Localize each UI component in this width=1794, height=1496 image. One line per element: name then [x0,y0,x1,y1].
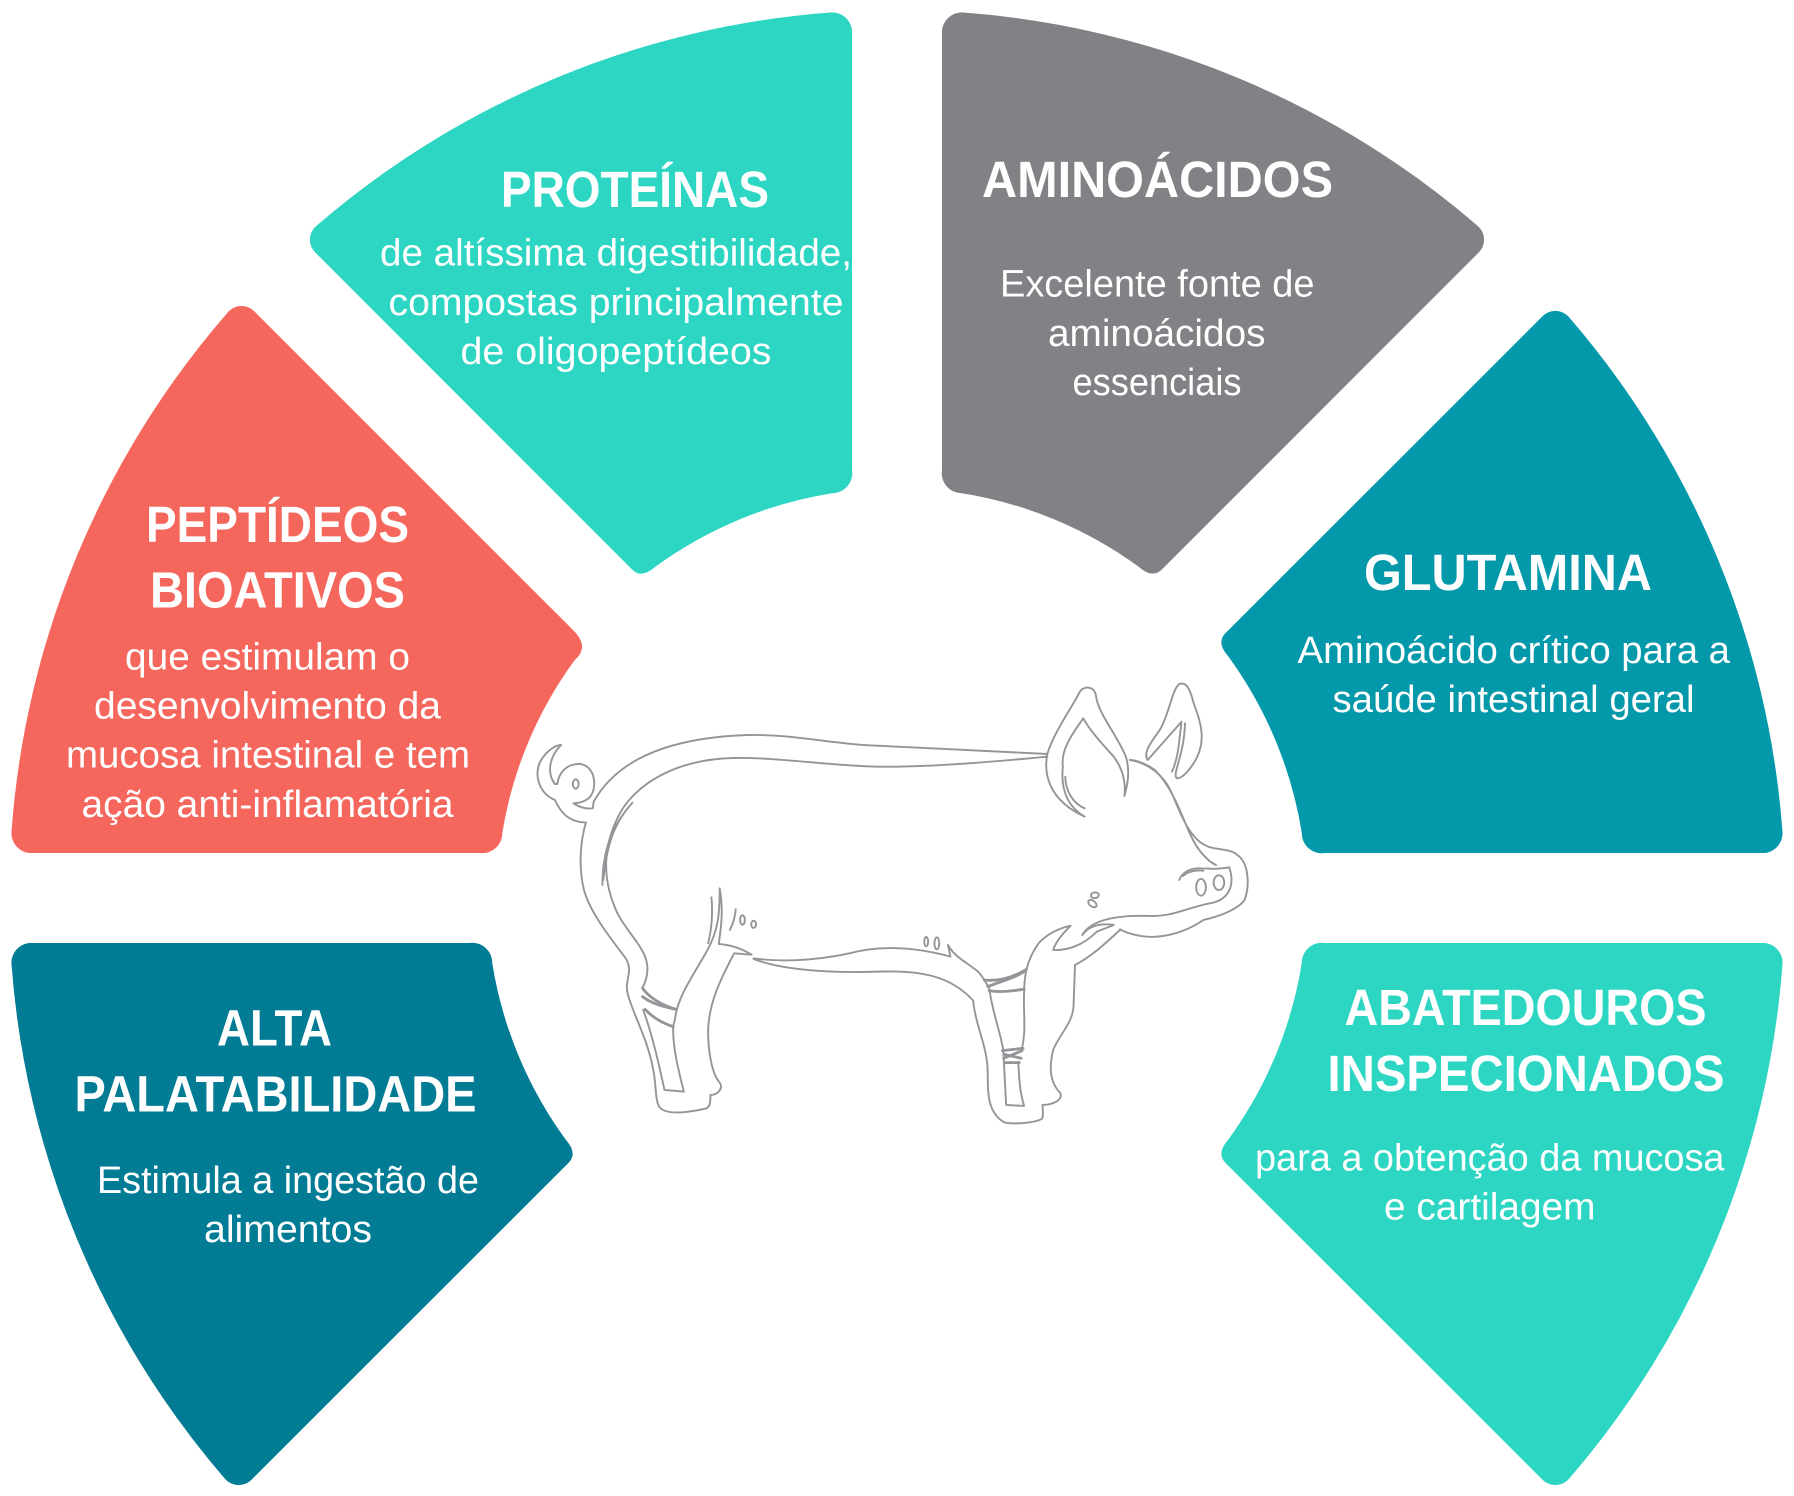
heading: abatedouros inspecionados [1328,979,1724,1102]
text: peptídeos description: mucosa intestinal e tem [66,734,470,776]
icon: pig line drawing [538,684,1248,1123]
tail mark [573,779,579,789]
panel: aminoácidos [942,12,1484,574]
text: glutamina description: Aminoácido crítico para a [1298,630,1731,672]
head top and snout [1120,760,1248,937]
heading: abatedouros inspecionados: ABATEDOUROS [1344,979,1706,1036]
tail [538,745,594,823]
hip shading [602,803,632,885]
ear: near [1046,688,1128,817]
text: peptídeos description [66,636,470,826]
text: glutamina description [1298,630,1731,721]
belly and front leg [754,945,1024,1106]
text: proteínas description: de oligopeptídeos [460,331,772,373]
panel: abatedouros inspecionados [1221,943,1783,1485]
panel: alta palatabilidade [11,943,573,1485]
text: proteínas description: de altíssima digestibilidade, [380,232,852,274]
shoulder [1022,867,1231,1050]
text: aminoácidos description: Excelente fonte de [1000,264,1314,306]
text: peptídeos description: que estimulam o [125,636,410,678]
text: abatedouros description [1255,1138,1725,1228]
heading: abatedouros inspecionados: INSPECIONADOS [1328,1045,1724,1102]
heading: peptídeos bioativos [146,496,409,618]
text: proteínas description: compostas principalmente [388,282,844,324]
text: alta palatabilidade description: alimentos [204,1209,372,1251]
text: abatedouros description: e cartilagem [1384,1186,1596,1228]
panel: proteínas [310,12,852,574]
segment shape: alta palatabilidade [11,943,573,1485]
back outer line [594,735,1047,802]
heading: proteínas: PROTEÍNAS [501,161,769,218]
text: peptídeos description: ação anti-inflamatória [82,784,454,826]
text: alta palatabilidade description [97,1160,479,1251]
back inner line and hind leg [606,757,1047,1092]
belly lower line and front leg outline [754,930,1120,1123]
text: aminoácidos description: aminoácidos [1048,313,1266,355]
heading: alta palatabilidade: ALTA [217,1000,332,1056]
text: aminoácidos description [1000,264,1314,404]
heading: peptídeos bioativos: PEPTÍDEOS [146,496,409,553]
segment shape: proteínas [310,12,852,574]
heading: alta palatabilidade: PALATABILIDADE [74,1066,476,1122]
text: abatedouros description: para a obtenção da mucosa [1255,1138,1725,1180]
leg bands [643,969,1027,1063]
heading: peptídeos bioativos: BIOATIVOS [150,562,405,618]
text: glutamina description: saúde intestinal geral [1332,679,1694,721]
segment shape: abatedouros inspecionados [1221,943,1783,1485]
flank marks [708,897,939,949]
panel: peptídeos bioativos [11,306,582,853]
segment shape: glutamina [1221,311,1783,853]
nostrils and cheek marks [1087,875,1224,908]
heading: alta palatabilidade [74,1000,476,1122]
text: alta palatabilidade description: Estimula a ingestão de [97,1160,479,1202]
heading: aminoácidos: AMINOÁCIDOS [982,151,1333,208]
segment shape: aminoácidos [942,12,1484,574]
rump and hind leg outline [581,823,752,1112]
segment shape: peptídeos bioativos [11,306,582,853]
panel: glutamina [1221,311,1783,853]
heading: glutamina: GLUTAMINA [1364,544,1652,601]
text: aminoácidos description: essenciais [1072,362,1242,404]
snout brow [1179,867,1229,880]
text: proteínas description [380,232,852,373]
ear: far [1146,684,1202,778]
text: peptídeos description: desenvolvimento da [94,686,442,728]
